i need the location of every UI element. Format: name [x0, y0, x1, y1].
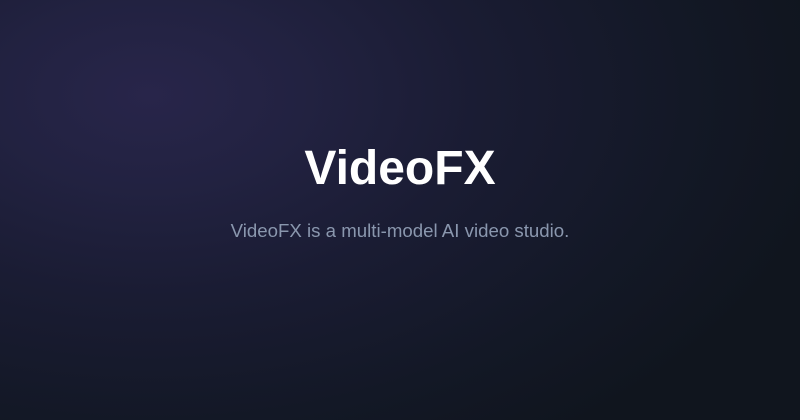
subtitle text: VideoFX is a multi-model AI video studio. [231, 220, 569, 241]
title: VideoFX [304, 142, 496, 195]
